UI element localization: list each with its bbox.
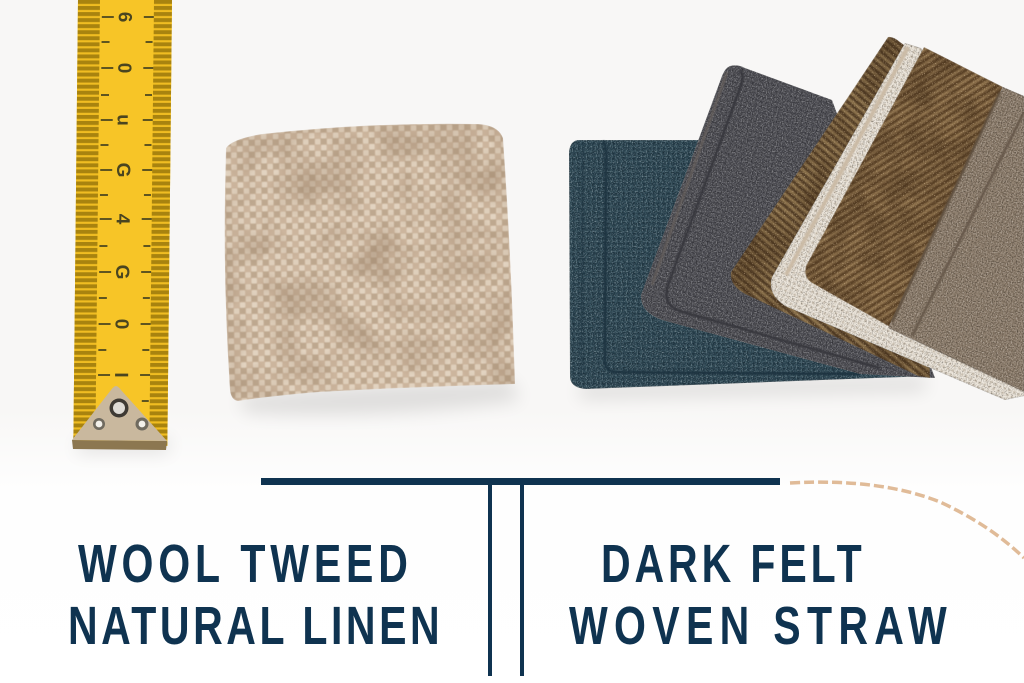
icon: yellow measuring tape: u xyxy=(113,114,134,126)
label: natural linen: NATURAL LINEN xyxy=(68,597,440,656)
panel: cream linen band xyxy=(771,43,1024,400)
icon: yellow measuring tape: 4 xyxy=(112,214,133,225)
label: wool tweed: WOOL TWEED xyxy=(78,535,408,594)
icon: yellow measuring tape xyxy=(72,0,172,452)
divider: right vertical rule xyxy=(520,485,524,676)
label: dark felt: DARK FELT xyxy=(601,535,862,594)
panel: charcoal felt swatch xyxy=(641,65,935,378)
panel: taupe swatch xyxy=(888,87,1024,392)
divider: left vertical rule xyxy=(488,485,492,676)
stitched arc xyxy=(790,482,1024,558)
label: woven straw: WOVEN STRAW xyxy=(569,597,947,656)
icon: yellow measuring tape: 0 xyxy=(111,319,132,329)
panel: brown herringbone fold xyxy=(805,47,1003,327)
panel: brown tweed swatch xyxy=(731,37,930,378)
divider: horizontal navy rule xyxy=(261,478,780,485)
icon: yellow measuring tape: G xyxy=(112,163,133,177)
icon: yellow measuring tape: 6 xyxy=(114,12,135,22)
heading: right materials xyxy=(569,535,947,656)
icon: yellow measuring tape: 0 xyxy=(113,63,134,73)
heading: left materials xyxy=(68,535,440,656)
panel: navy felt swatch xyxy=(569,140,930,398)
icon: yellow measuring tape: I xyxy=(110,372,131,378)
panel: beige wool roll xyxy=(225,124,520,414)
icon: yellow measuring tape: G xyxy=(111,265,132,279)
